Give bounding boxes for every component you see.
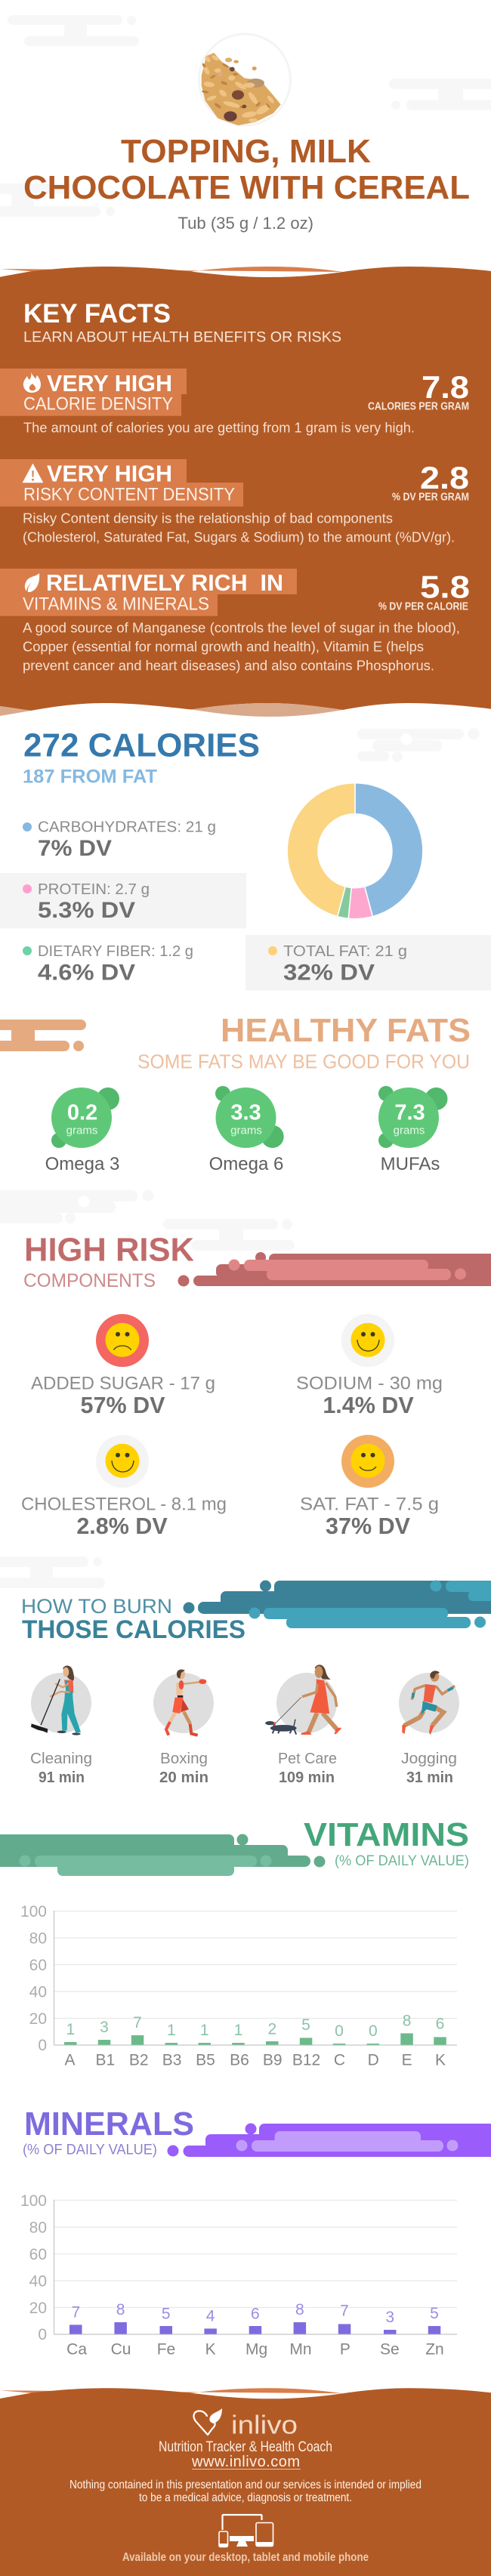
icon: jogger <box>402 1671 455 1735</box>
activity: boxing <box>153 1669 214 1786</box>
component: cholesterol: CHOLESTEROL - 8.1 mg <box>21 1494 227 1514</box>
bar chart: minerals: 4 <box>206 2307 215 2325</box>
bar chart: minerals: 100 <box>20 2192 47 2210</box>
bar chart: minerals: K <box>205 2340 216 2358</box>
bar chart: minerals: 8 <box>295 2301 304 2318</box>
badge: omega 3: grams <box>66 1124 97 1137</box>
bar chart: minerals: 0 <box>38 2326 47 2343</box>
subheading: vitamins percent daily value: (% OF DAILY VALUE) <box>335 1853 469 1869</box>
component: added sugar: 57% DV <box>81 1393 165 1418</box>
ribbon: minerals <box>168 2124 491 2157</box>
component: added sugar <box>31 1314 215 1418</box>
legend: carbohydrates: CARBOHYDRATES: 21 g <box>38 819 216 836</box>
fact: vitamins and minerals: prevent cancer and heart diseases) and also contains Phosphorus. <box>23 659 434 674</box>
activity: pet care: Pet Care <box>278 1751 337 1767</box>
bar chart: minerals: Zn <box>425 2340 444 2358</box>
value: 2.8: 2.8 <box>420 460 469 495</box>
fact: risky content density <box>0 459 469 545</box>
bar chart: vitamins: K <box>435 2051 446 2069</box>
fact: calorie density: CALORIES PER GRAM <box>368 401 469 413</box>
legend: dietary fiber <box>23 942 193 985</box>
bar chart: minerals: 20 <box>29 2300 47 2317</box>
bar chart: minerals: Mn <box>289 2340 312 2358</box>
bar chart: vitamins: B12 <box>292 2051 320 2069</box>
title: CHOCOLATE WITH CEREAL <box>23 169 470 206</box>
bar chart: minerals: 6 <box>251 2306 260 2323</box>
bar chart: minerals: Mg <box>246 2340 267 2358</box>
icon: happy face <box>341 1314 394 1367</box>
bar chart: minerals: 8 <box>116 2301 125 2318</box>
heading: key facts: KEY FACTS <box>23 299 171 329</box>
donut chart: macronutrients <box>287 783 423 919</box>
badge: omega 3 <box>45 1087 119 1174</box>
title: TOPPING, MILK <box>121 133 371 170</box>
bar chart: minerals: 3 <box>385 2309 394 2326</box>
activity: cleaning: Cleaning <box>30 1751 92 1767</box>
bar chart: vitamins: 40 <box>29 1983 47 2001</box>
fact: risky content density: VERY HIGH <box>47 461 172 487</box>
bar chart: vitamins <box>20 1903 457 2069</box>
component: saturated fat: SAT. FAT - 7.5 g <box>300 1494 439 1514</box>
heading: minerals: MINERALS <box>24 2106 194 2143</box>
bar chart: vitamins: 5 <box>301 2016 310 2034</box>
heading: vitamins: VITAMINS <box>304 1816 469 1853</box>
badge: omega 6 <box>209 1086 284 1174</box>
bar chart: vitamins: 1 <box>234 2022 242 2039</box>
icon: sad face <box>96 1314 149 1367</box>
bar chart: vitamins: 20 <box>29 2010 47 2028</box>
component: cholesterol: 2.8% DV <box>76 1513 168 1539</box>
fact: calorie density <box>0 369 469 436</box>
legend: carbohydrates: 7% DV <box>38 836 112 861</box>
icon: devices <box>219 2515 273 2547</box>
bar chart: vitamins: B9 <box>263 2051 283 2069</box>
fact: risky content density: Risky Content density is the relationship of bad components <box>23 511 393 526</box>
icon: flame <box>23 372 41 393</box>
heading: those calories: THOSE CALORIES <box>22 1615 246 1644</box>
icon: warning <box>23 464 43 483</box>
bar chart: minerals: 40 <box>29 2273 47 2290</box>
bar chart: vitamins: 2 <box>267 2020 276 2038</box>
bar chart: vitamins: 1 <box>66 2021 75 2038</box>
bar chart: minerals: 80 <box>29 2219 47 2237</box>
icon: boxer <box>166 1669 206 1735</box>
panel: key facts <box>0 267 491 717</box>
activity: pet care <box>265 1664 341 1786</box>
value: 7.8: 7.8 <box>422 369 469 405</box>
bar chart: vitamins: 3 <box>100 2019 109 2036</box>
bar chart: minerals: Se <box>380 2340 400 2358</box>
disclaimer: Nothing contained in this presentation and our services is intended or implied <box>69 2479 422 2491</box>
fact: vitamins and minerals: Copper (essential for normal growth and health), Vitamin E (helps <box>23 640 424 655</box>
bar chart: minerals: Fe <box>157 2340 175 2358</box>
logo: inlivo <box>193 2408 298 2440</box>
bar chart: minerals: 5 <box>162 2306 171 2323</box>
fact: risky content density: RISKY CONTENT DENSITY <box>23 485 235 505</box>
subheading: calories from fat: 187 FROM FAT <box>23 767 157 788</box>
bar chart: vitamins: A <box>64 2051 76 2069</box>
fact: calorie density: The amount of calories you are getting from 1 gram is very high. <box>23 421 415 436</box>
component: cholesterol <box>21 1435 227 1539</box>
subheading: LEARN ABOUT HEALTH BENEFITS OR RISKS <box>23 329 341 346</box>
badge: omega 6: 3.3 <box>230 1101 261 1125</box>
activity: boxing: Boxing <box>160 1751 208 1767</box>
icon: happy face <box>96 1435 149 1488</box>
icon: woman walking dog <box>265 1664 341 1735</box>
serving size: Tub (35 g / 1.2 oz) <box>178 214 313 233</box>
component: sodium: 1.4% DV <box>323 1393 414 1418</box>
fact: vitamins and minerals <box>0 569 470 674</box>
fact: calorie density: CALORIE DENSITY <box>23 394 173 415</box>
availability note: Available on your desktop, tablet and mobile phone <box>122 2551 369 2564</box>
subheading: components: COMPONENTS <box>23 1270 156 1291</box>
heading: healthy fats: HEALTHY FATS <box>221 1012 471 1049</box>
bar chart: minerals: 7 <box>340 2303 349 2320</box>
disclaimer <box>69 2479 422 2504</box>
ribbon: healthy fats <box>0 1020 86 1051</box>
bar chart: vitamins: B6 <box>230 2051 249 2069</box>
component: sodium <box>296 1314 443 1418</box>
bar chart: vitamins: 1 <box>200 2022 209 2039</box>
panel: footer <box>0 2388 491 2576</box>
bar chart: minerals: Cu <box>111 2340 131 2358</box>
component: added sugar: ADDED SUGAR - 17 g <box>31 1373 215 1393</box>
bar chart: vitamins: 0 <box>38 2037 47 2054</box>
badge: mufas: 7.3 <box>394 1101 425 1125</box>
subheading: minerals percent daily value: (% OF DAILY VALUE) <box>23 2142 157 2158</box>
bar chart: vitamins: 6 <box>436 2016 444 2033</box>
fact: calorie density: VERY HIGH <box>47 370 172 396</box>
fact: vitamins and minerals: RELATIVELY RICH IN <box>46 569 283 596</box>
bar chart: vitamins: 8 <box>403 2012 411 2029</box>
subheading: healthy fats: SOME FATS MAY BE GOOD FOR YOU <box>137 1052 470 1073</box>
bar chart: vitamins: B1 <box>95 2051 115 2069</box>
disclaimer: to be a medical advice, diagnosis or treatment. <box>139 2491 352 2504</box>
legend: protein: 5.3% DV <box>38 898 135 923</box>
heading: calories: 272 CALORIES <box>23 727 260 764</box>
component: sodium: SODIUM - 30 mg <box>296 1373 443 1393</box>
badge: omega 3: Omega 3 <box>45 1154 119 1174</box>
badge: omega 3: 0.2 <box>67 1101 97 1125</box>
website: www.inlivo.com <box>191 2454 300 2470</box>
component: saturated fat: 37% DV <box>326 1513 411 1539</box>
fact: vitamins and minerals: VITAMINS & MINERALS <box>23 594 209 615</box>
bar chart: minerals: P <box>340 2340 350 2358</box>
ribbon: high risk <box>178 1252 491 1287</box>
ribbon: burn calories <box>183 1580 491 1628</box>
bar chart: vitamins: B5 <box>196 2051 215 2069</box>
food image: granola in circle <box>199 34 290 125</box>
bar chart: vitamins: E <box>402 2051 412 2069</box>
activity: pet care: 109 min <box>279 1769 335 1786</box>
heading: how to burn: HOW TO BURN <box>21 1595 172 1618</box>
badge: mufas: grams <box>394 1124 425 1137</box>
legend: protein <box>23 881 150 923</box>
bar chart: vitamins: 100 <box>20 1903 47 1920</box>
legend background: protein <box>0 873 246 928</box>
component: saturated fat <box>300 1435 439 1539</box>
badge: mufas: MUFAs <box>381 1154 440 1174</box>
legend background: total fat <box>246 935 491 991</box>
activity: cleaning: 91 min <box>39 1769 85 1786</box>
legend: total fat: TOTAL FAT: 21 g <box>283 942 407 960</box>
bar chart: minerals: 5 <box>430 2305 439 2322</box>
fact: risky content density: % DV PER GRAM <box>392 492 469 504</box>
legend: dietary fiber: 4.6% DV <box>38 960 135 985</box>
logo: inlivo: inlivo <box>231 2411 298 2440</box>
bar chart: vitamins: 60 <box>29 1957 47 1974</box>
legend: total fat <box>268 942 407 985</box>
legend: total fat: 32% DV <box>283 960 375 985</box>
icon: person sweeping <box>31 1666 81 1735</box>
bar chart: vitamins: B3 <box>162 2051 181 2069</box>
badge: omega 6: grams <box>230 1124 262 1137</box>
bar chart: vitamins: 80 <box>29 1930 47 1947</box>
badge: mufas <box>378 1086 447 1174</box>
bar chart: vitamins: 0 <box>335 2022 344 2040</box>
bar chart: vitamins: 7 <box>133 2014 142 2031</box>
activity: cleaning <box>30 1666 92 1786</box>
activity: jogging: Jogging <box>401 1751 457 1767</box>
bar chart: vitamins: 1 <box>167 2022 176 2039</box>
value: 5.8: 5.8 <box>420 569 470 605</box>
bar chart: vitamins: 0 <box>369 2022 378 2040</box>
legend: carbohydrates <box>23 819 216 861</box>
heading: high risk: HIGH RISK <box>24 1231 194 1268</box>
fact: risky content density: (Cholesterol, Saturated Fat, Sugars & Sodium) to the amount (%DV/gr). <box>23 530 455 545</box>
bar chart: minerals: 60 <box>29 2246 47 2263</box>
activity: jogging <box>399 1671 459 1786</box>
activity: jogging: 31 min <box>406 1769 453 1786</box>
icon: mild smile face <box>341 1435 394 1488</box>
bar chart: minerals: Ca <box>66 2340 87 2358</box>
ribbon: vitamins <box>0 1834 325 1876</box>
bar chart: vitamins: B2 <box>129 2051 149 2069</box>
badge: omega 6: Omega 6 <box>209 1154 283 1174</box>
legend: dietary fiber: DIETARY FIBER: 1.2 g <box>38 942 193 960</box>
bar chart: minerals <box>20 2192 457 2358</box>
bar chart: minerals: 7 <box>71 2303 80 2321</box>
bar chart: vitamins: D <box>368 2051 379 2069</box>
icon: leaf <box>25 573 39 592</box>
activity: boxing: 20 min <box>159 1769 208 1786</box>
legend: protein: PROTEIN: 2.7 g <box>38 881 150 898</box>
fact: vitamins and minerals: A good source of Manganese (controls the level of sugar in the blood), <box>23 621 460 636</box>
tagline: Nutrition Tracker & Health Coach <box>159 2439 332 2455</box>
fact: vitamins and minerals: % DV PER CALORIE <box>378 601 468 613</box>
title <box>23 133 470 206</box>
bar chart: vitamins: C <box>334 2051 345 2069</box>
